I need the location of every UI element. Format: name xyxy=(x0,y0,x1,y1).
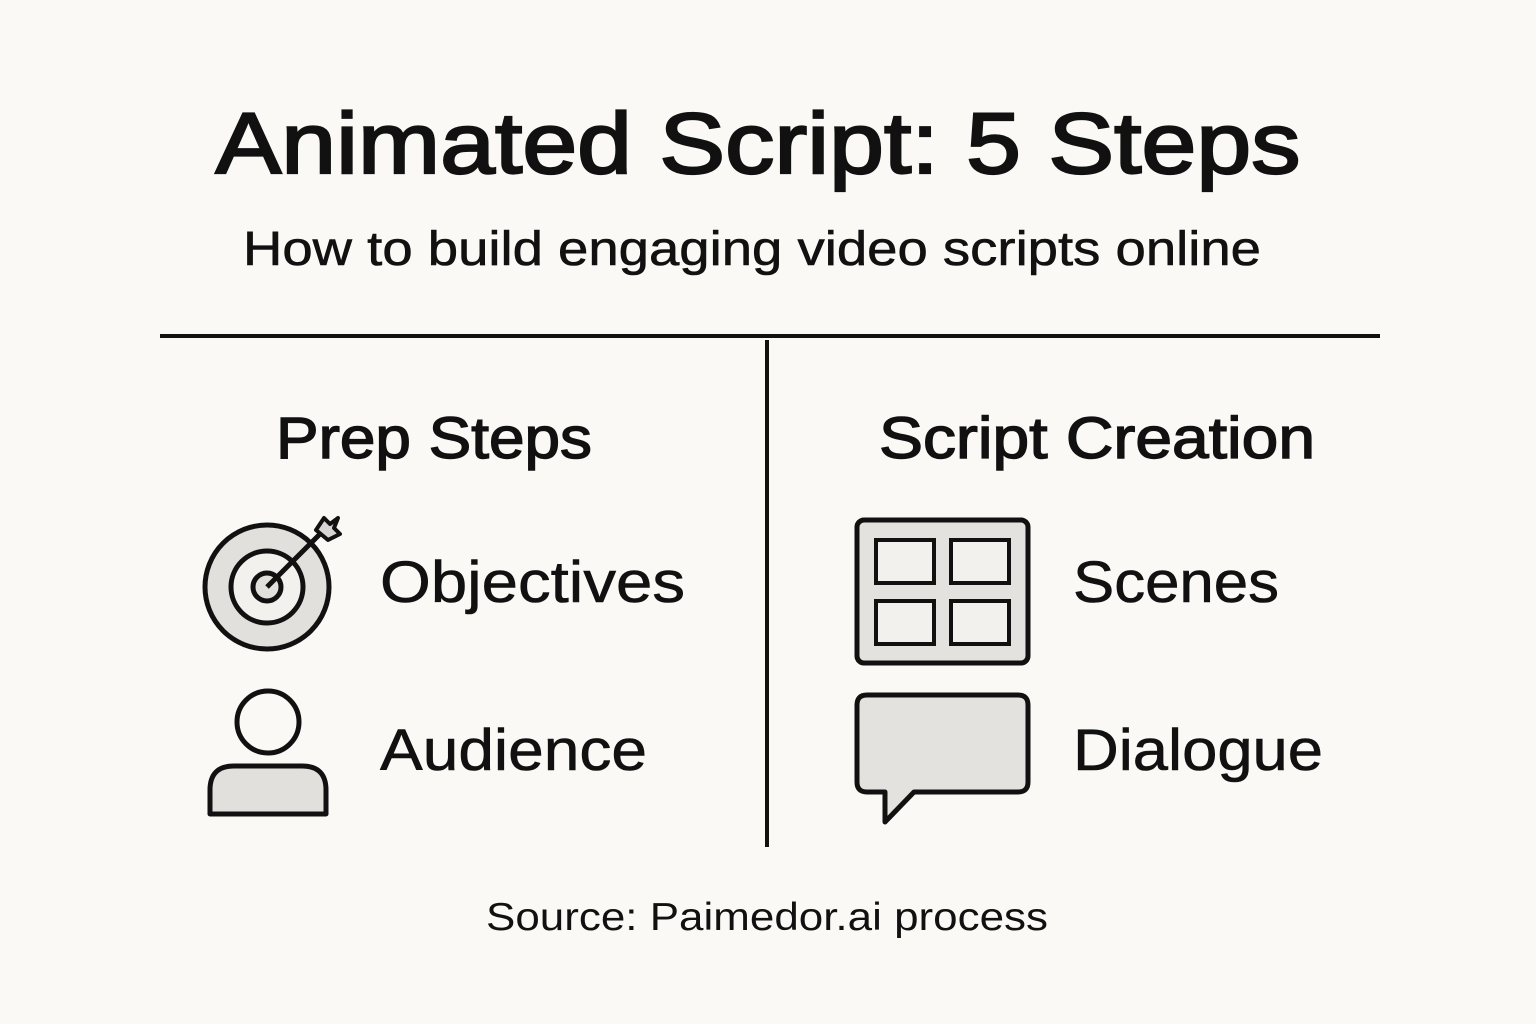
label: objectives: Objectives xyxy=(380,550,685,615)
panel: prep steps xyxy=(205,406,685,814)
heading: script creation: Script Creation xyxy=(879,406,1315,471)
icon: dialogue xyxy=(857,695,1028,822)
heading: prep steps: Prep Steps xyxy=(276,406,592,471)
label: scenes: Scenes xyxy=(1073,550,1279,615)
icon: scenes xyxy=(857,520,1028,663)
source: Source: Paimedor.ai process xyxy=(486,896,1048,939)
icon: target xyxy=(205,518,340,649)
icon: person xyxy=(210,691,326,814)
title: Animated Script: 5 Steps xyxy=(216,96,1300,192)
label: audience: Audience xyxy=(380,718,647,783)
label: dialogue: Dialogue xyxy=(1073,718,1323,783)
panel: script creation xyxy=(857,406,1323,822)
subtitle: How to build engaging video scripts online xyxy=(243,223,1261,276)
